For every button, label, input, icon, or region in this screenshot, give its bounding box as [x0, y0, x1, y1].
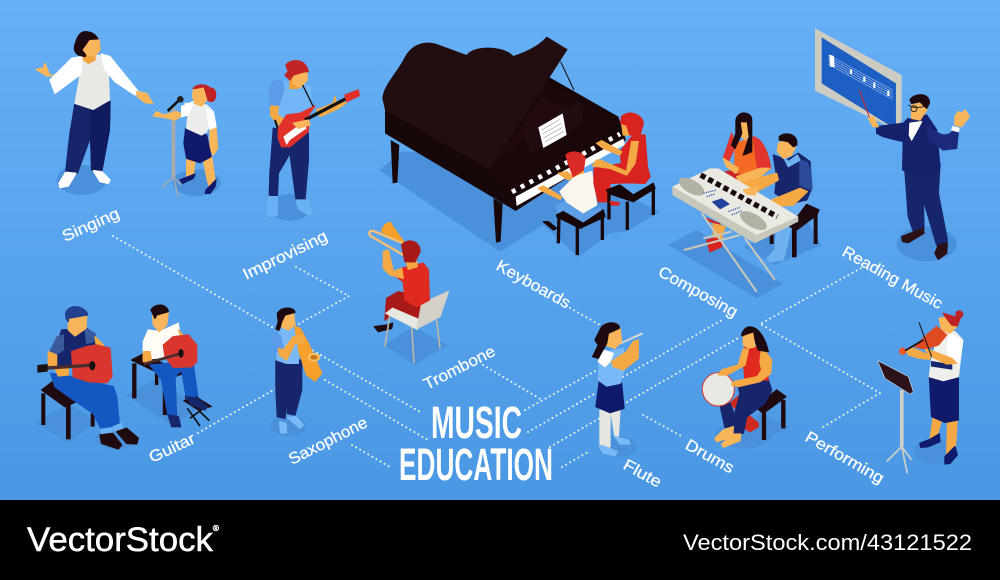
footer logo text: VectorStock — [27, 521, 208, 559]
figure: violin performer with music stand — [878, 310, 963, 473]
label: Composing: Composing — [655, 264, 740, 321]
label: Improvising: Improvising — [240, 228, 330, 284]
label: Guitar: Guitar — [147, 430, 199, 467]
label: Reading Music: Reading Music — [839, 244, 945, 313]
footer logo text: ® — [213, 524, 219, 533]
label: Flute: Flute — [620, 457, 664, 491]
figure: reading music teacher with blackboard — [815, 28, 969, 261]
figure: seated guitarists — [36, 305, 213, 449]
label: Saxophone: Saxophone — [286, 414, 371, 469]
dotted connector lines — [113, 236, 880, 467]
figure: improvising guitarist — [267, 61, 359, 221]
figure: flute player — [593, 323, 643, 457]
figure: singing teacher and girl — [36, 32, 221, 197]
label: Performing: Performing — [802, 429, 887, 487]
figure: saxophone player — [270, 308, 322, 436]
footer URL text: VectorStock.com/43121522 — [683, 530, 972, 555]
figure: grand piano with two players — [379, 37, 660, 257]
figure: trombone player on chair — [369, 223, 448, 365]
title — [399, 397, 553, 490]
label: Drums: Drums — [682, 437, 737, 477]
label: Singing: Singing — [60, 205, 122, 246]
figure: drummer — [702, 327, 790, 448]
label: Keyboards: Keyboards — [493, 258, 573, 312]
title: EDUCATION — [399, 439, 553, 490]
figure: composing pair with electronic keyboard — [668, 113, 822, 298]
title: MUSIC — [431, 397, 522, 448]
label: Trombone: Trombone — [421, 343, 498, 394]
footer bar — [0, 500, 1000, 580]
